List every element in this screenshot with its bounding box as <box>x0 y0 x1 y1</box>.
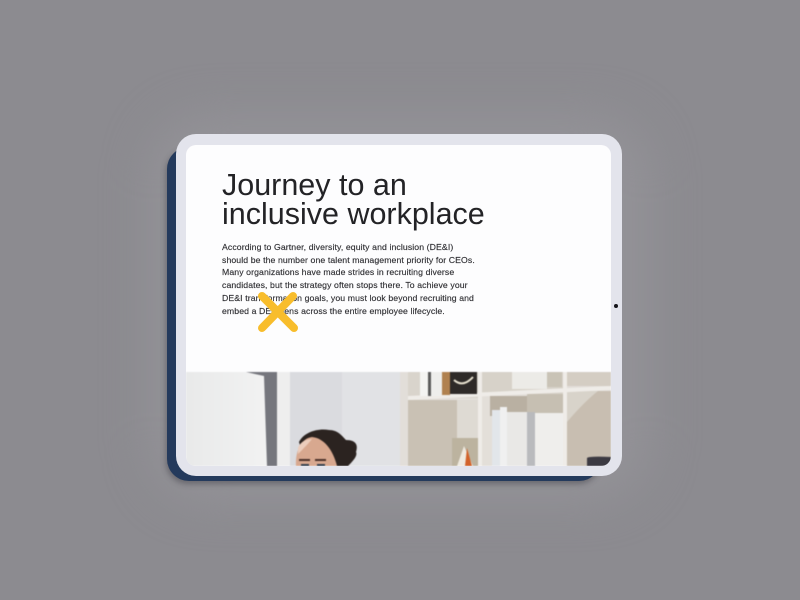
person head <box>296 430 357 466</box>
boxes on upper shelf <box>512 372 562 389</box>
intro paragraph: DE&I transformation goals, you must look beyond recruiting and <box>222 293 474 303</box>
tablet frame <box>176 134 622 476</box>
title <box>222 168 485 231</box>
office photo <box>186 371 611 466</box>
screen <box>186 145 611 466</box>
intro paragraph: should be the number one talent management priority for CEOs. <box>222 255 475 265</box>
title: Journey to an <box>222 168 407 202</box>
dark object corner <box>587 457 611 466</box>
shelving unit <box>400 372 611 466</box>
window <box>186 372 290 466</box>
cursor cross mark <box>258 292 298 332</box>
books on upper shelf <box>420 372 477 396</box>
intro paragraph: candidates, but the strategy often stops there. To achieve your <box>222 280 468 290</box>
white binders <box>492 407 563 466</box>
intro paragraph: Many organizations have made strides in recruiting diverse <box>222 267 454 277</box>
intro paragraph: According to Gartner, diversity, equity and inclusion (DE&I) <box>222 242 453 252</box>
soft glow around tablet <box>150 115 650 500</box>
title: inclusive workplace <box>222 197 485 231</box>
intro paragraph <box>222 242 475 316</box>
figurine <box>452 438 478 466</box>
camera dot <box>614 304 618 308</box>
tablet <box>176 134 622 476</box>
tablet shadow edge <box>167 147 601 481</box>
intro paragraph: embed a DE&I lens across the entire employee lifecycle. <box>222 306 445 316</box>
photo background wall <box>186 372 402 466</box>
